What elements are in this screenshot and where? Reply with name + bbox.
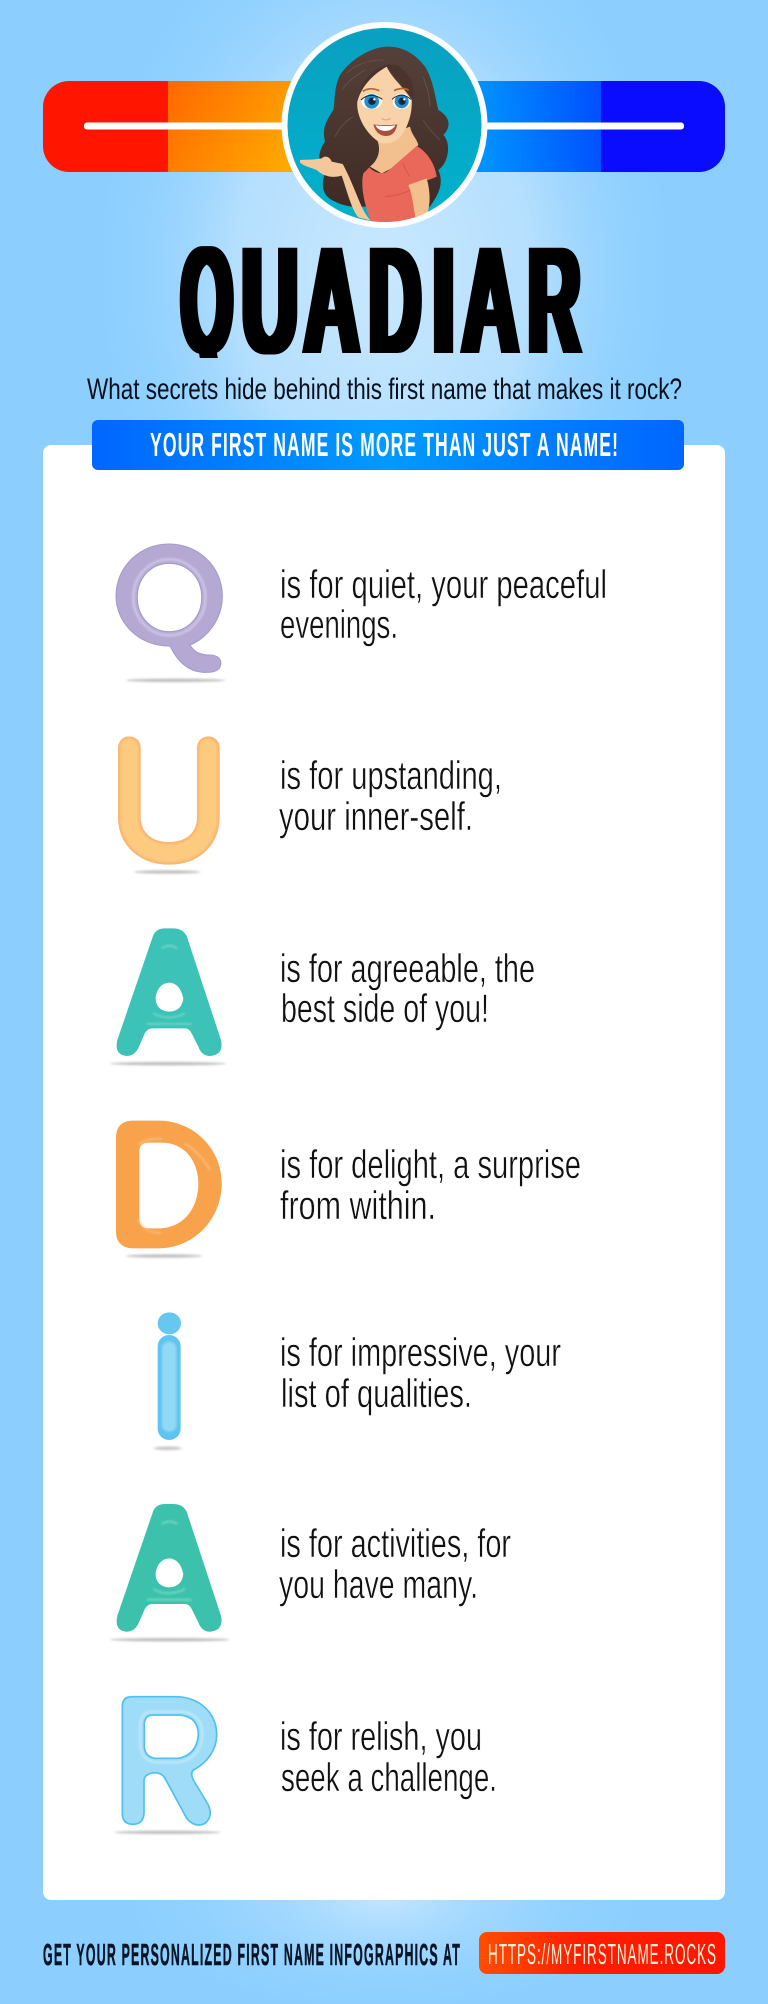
- title: U: [242, 214, 298, 386]
- letter i: [154, 1312, 182, 1450]
- row: D: [116, 1121, 581, 1258]
- row: R: [114, 1697, 497, 1834]
- letter Q: [116, 544, 226, 682]
- face: [357, 67, 412, 144]
- text R: [280, 1715, 497, 1800]
- white content panel: [43, 445, 725, 1900]
- text A second: [279, 1522, 511, 1607]
- text R: is for relish, you: [280, 1715, 482, 1759]
- title: A: [462, 214, 518, 386]
- title: Q: [181, 214, 233, 385]
- text U: [279, 754, 502, 839]
- row: A: [110, 928, 535, 1065]
- letter A second: [110, 1504, 230, 1641]
- text I: [280, 1331, 561, 1416]
- avatar: woman in circle: [284, 25, 484, 225]
- text A: is for agreeable, the: [280, 947, 535, 991]
- row: U: [129, 748, 502, 874]
- text U: your inner-self.: [279, 795, 473, 839]
- mouth: [373, 124, 397, 136]
- hair: [319, 47, 449, 207]
- text Q: evenings.: [280, 603, 398, 647]
- row: I: [154, 1312, 561, 1450]
- header colour bar: [43, 81, 725, 172]
- letter A: [110, 928, 227, 1065]
- text A second: you have many.: [279, 1563, 478, 1607]
- letter D: [116, 1121, 222, 1258]
- row: Q: [116, 544, 607, 682]
- nose: [382, 118, 391, 120]
- row: A second: [110, 1504, 511, 1641]
- text Q: [280, 563, 607, 647]
- neck: [370, 127, 418, 173]
- banner: [92, 420, 684, 470]
- shirt: [362, 146, 437, 223]
- text Q: is for quiet, your peaceful: [280, 563, 607, 607]
- title: A: [304, 215, 359, 386]
- text R: seek a challenge.: [281, 1756, 497, 1800]
- title: D: [369, 216, 421, 386]
- text A: [280, 947, 535, 1031]
- eyebrows: [363, 88, 409, 91]
- title: [181, 214, 580, 386]
- text U: is for upstanding,: [280, 754, 502, 798]
- text A second: is for activities, for: [280, 1522, 511, 1566]
- title: I: [433, 214, 454, 386]
- title: R: [528, 216, 580, 386]
- text I: list of qualities.: [281, 1372, 472, 1416]
- arm and hand: [408, 178, 430, 217]
- text D: [280, 1143, 581, 1228]
- footer url button: [479, 1932, 725, 1974]
- letter U: [129, 748, 208, 874]
- eyes: [361, 94, 382, 109]
- text D: is for delight, a surprise: [280, 1143, 581, 1187]
- letter R: [114, 1697, 221, 1834]
- text D: from within.: [280, 1184, 436, 1228]
- text I: is for impressive, your: [280, 1331, 561, 1375]
- text A: best side of you!: [281, 987, 489, 1031]
